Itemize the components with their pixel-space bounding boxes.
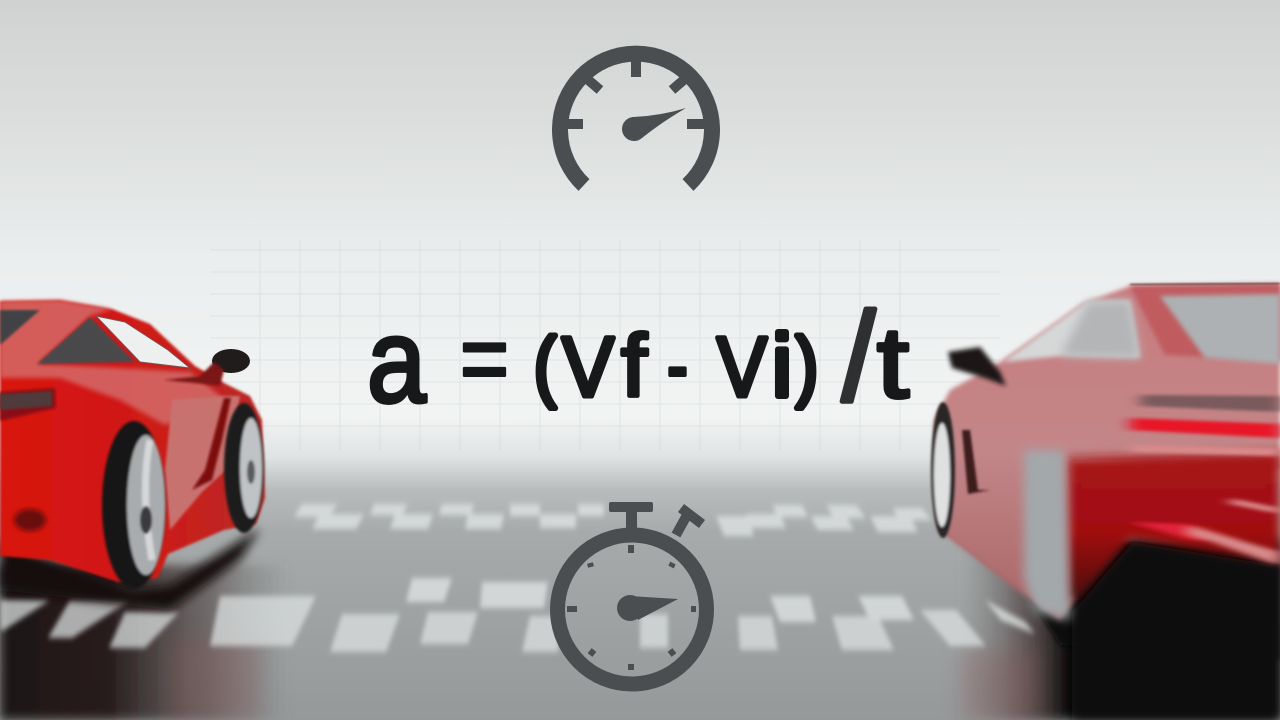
left car: body [0,300,265,582]
road: crossing stripes [0,504,1035,652]
gauge arc [560,54,712,185]
gauge needle [622,108,686,141]
formula: a [367,294,426,428]
stopwatch case [558,535,706,684]
right car: rear windshield [1160,294,1280,364]
left car: upper highlight [0,300,228,425]
formula: / [842,288,875,427]
red car on the left, seen from behind [0,300,265,610]
left car: ground shadow [0,528,260,610]
road: dark wet reflections beneath the cars [0,540,1280,720]
right car: upper roof tint [1130,284,1280,360]
right car: red streak tail light [1130,418,1280,438]
left car: mirror [164,349,250,386]
right car: dark lower sill [1072,542,1280,720]
formula: i [772,316,792,415]
formula: ( [534,321,556,409]
formula: - [667,318,688,412]
right car: front wheel [931,402,955,538]
right car: roof line [1130,283,1280,285]
stopwatch needle [617,595,678,621]
formula: V [562,320,614,414]
right car: side window [1003,300,1140,362]
formula: V [717,320,767,414]
right car: blurred rear wheel [1024,450,1070,620]
stopwatch tick marks [567,545,696,670]
formula: = [460,303,509,413]
stopwatch icon [558,502,706,684]
right car: shadow [945,530,1280,660]
left car: dark side window [37,317,135,364]
right car: mirror [948,347,1006,386]
left car: rear wheel [102,421,166,589]
formula: t [877,307,909,419]
red car on the right, motion blurred [931,283,1280,720]
left car: front wheel [224,403,264,533]
speedometer icon [560,54,712,185]
left car: bumper vent [14,509,46,531]
right car: rear red quarter [1068,452,1280,600]
left car: side door panel [165,396,240,530]
stopwatch side button [676,508,702,535]
formula: ) [796,321,818,409]
gauge tick marks [566,60,704,124]
left car: side air intake [192,398,231,490]
formula: f [621,316,648,415]
right car: grey shading above tail light [1140,395,1280,412]
left car: tail light [0,388,56,421]
right car: front door vent [962,430,990,494]
left car: light side window [96,316,190,368]
right car: pink body [934,284,1280,620]
stopwatch crown [609,502,653,532]
formula [367,288,909,428]
right car: streak highlights [1130,445,1280,566]
left car: rear window [0,310,40,345]
